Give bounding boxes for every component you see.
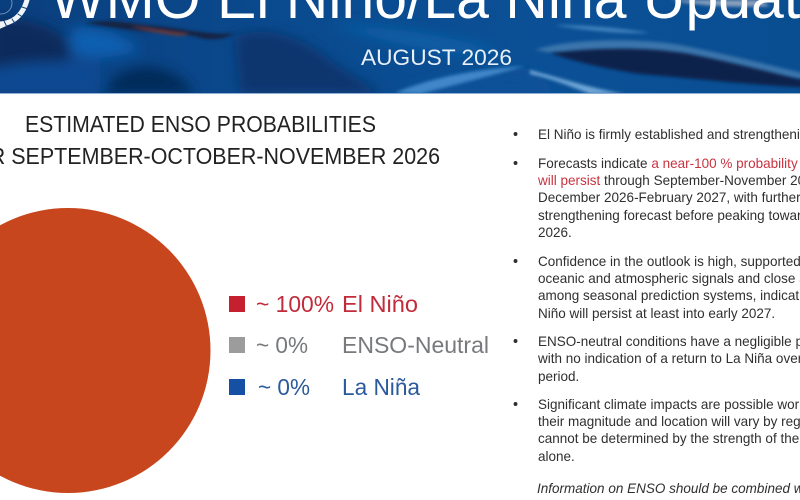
pie chart [0,208,210,493]
heading: ESTIMATED ENSO PROBABILITIES [25,111,376,137]
legend: El Niño: ~ 100% [256,291,334,317]
icon: UN emblem [0,0,28,29]
bullet: neutral [514,334,800,384]
header banner [0,0,800,94]
bullet: confidence: Niño will persist at least into early 2027. [538,306,775,321]
panel: key messages [514,127,800,500]
legend [229,291,489,400]
bullet: forecasts [514,156,800,240]
bullet: confidence [514,254,800,321]
legend: La Niña [229,374,420,400]
legend: ENSO-Neutral: ~ 0% [256,332,308,358]
bullet: impacts: alone. [538,449,575,464]
right dune [535,40,800,80]
heading [0,111,440,169]
bullet: neutral: period. [538,369,579,384]
legend: La Niña: La Niña [342,374,420,400]
date: AUGUST 2026 [361,45,512,70]
legend: ENSO-Neutral: ENSO-Neutral [342,332,489,358]
legend: El Niño: El Niño [342,291,418,317]
legend: El Niño [229,291,418,317]
panel: probabilities [0,111,489,493]
bullet: impacts [514,397,800,464]
bullet: forecasts: December 2026-February 2027, with further [538,190,800,205]
bullet: forecasts: 2026. [538,225,572,240]
legend: ENSO-Neutral [229,332,489,358]
legend: La Niña: ~ 0% [258,374,310,400]
